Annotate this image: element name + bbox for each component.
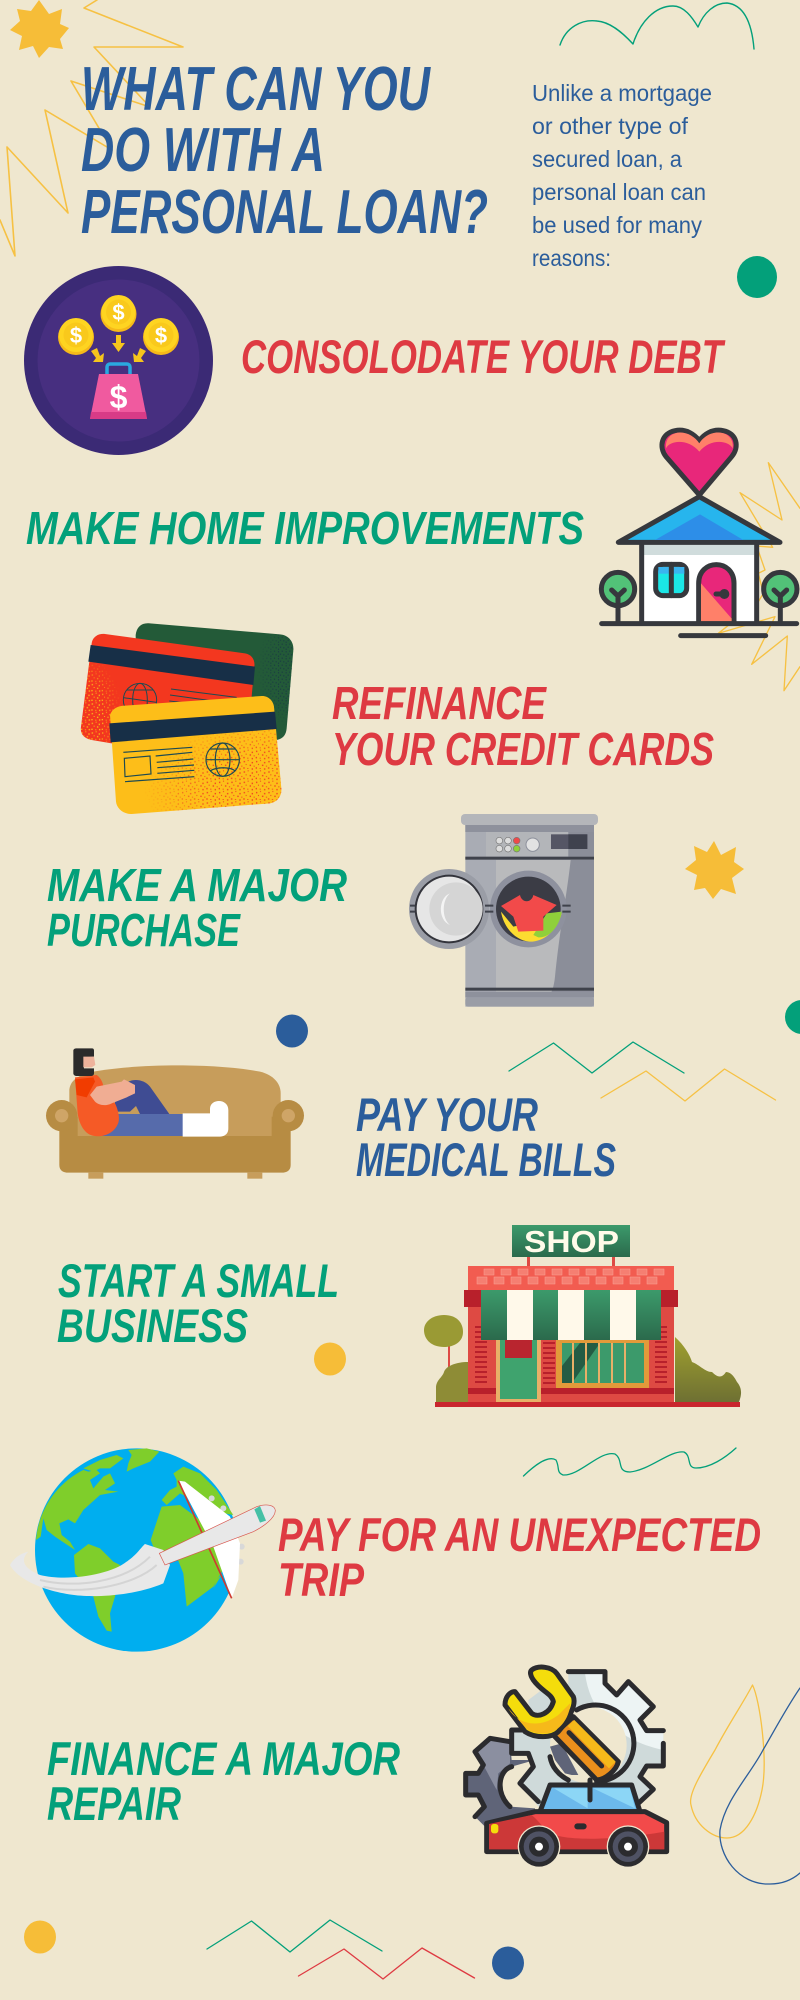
decoration: blue dot bottom [492,1946,524,1980]
decoration: yellow dot [314,1342,346,1376]
open door [409,869,489,949]
yellow zigzag behind house [718,463,800,691]
wrench shaft [553,1717,618,1780]
icon: credit cards [81,623,293,814]
icon: man on sofa [46,1048,304,1179]
door [496,1340,541,1402]
coins: $ [155,323,167,348]
wheels [518,1825,560,1868]
contrail [10,1544,170,1596]
title [81,55,488,247]
car body [487,1812,667,1852]
shop window [556,1340,649,1388]
icon: debt consolidation coins and bag [24,266,213,455]
decoration: green dot top right [737,256,777,298]
window [656,564,687,596]
heading: make a major purchase: MAKE A MAJOR [47,859,347,911]
house body [642,542,757,623]
decoration: green arcs top right [560,3,754,49]
red card [81,634,254,743]
decoration: yellow teardrop line [691,1685,764,1838]
decoration: green zigzag bottom [207,1920,382,1952]
heading: make a major purchase [47,859,347,956]
decoration: blue loop line [720,1688,800,1884]
heading: start a small business [57,1254,339,1352]
small gear [466,1738,535,1827]
yellow card [110,696,281,814]
heading: finance a major repair: REPAIR [47,1777,181,1830]
decoration: red zigzag bottom [298,1948,474,1979]
intro text block: secured loan, a [532,146,682,172]
decoration: green squiggle [524,1448,736,1476]
title: PERSONAL LOAN? [81,178,488,247]
roof [618,497,780,542]
trees [601,572,635,606]
intro text block: personal loan can [532,179,706,205]
car windows [540,1785,640,1812]
icon: washing machine [409,814,598,1007]
building [468,1266,674,1402]
fuselage [159,1505,275,1565]
icon: house with heart [601,430,800,691]
intro text block: reasons: [532,245,611,271]
sign [512,1225,630,1257]
control panel [496,834,587,852]
heading: pay your medical bills: PAY YOUR [356,1088,538,1141]
wing and engines [209,1495,215,1501]
coins: $ [70,323,82,348]
heading: refinance your credit cards: REFINANCE [332,677,547,729]
heading: pay for an unexpected trip [278,1508,761,1606]
green card [136,623,293,740]
coins: $ [112,300,125,325]
heading: finance a major repair: FINANCE A MAJOR [47,1732,400,1785]
icon: globe with plane [10,1448,275,1652]
decoration: yellow zigzag top left [0,0,183,256]
door [699,565,734,623]
heart [662,430,736,495]
heading: pay for an unexpected trip: TRIP [278,1553,365,1606]
intro text block: Unlike a mortgage [532,80,712,106]
hinges [410,906,571,912]
continents [36,1448,233,1632]
decoration: yellow dot bottom [24,1920,56,1954]
icon: gears wrench and car [466,1667,667,1868]
intro text block: or other type of [532,113,689,139]
coins [58,295,179,355]
decoration: blue dot [276,1014,308,1048]
decoration: green dot edge right [785,1000,800,1034]
man [115,1080,169,1114]
intro text block [532,80,712,271]
heading: make home improvements: MAKE HOME IMPROVEMENTS [26,502,584,554]
decoration: green zigzag [509,1042,684,1073]
heading: pay your medical bills [356,1088,616,1186]
ground strip [435,1402,740,1407]
icon: shop: SHOP [524,1224,619,1259]
ground lines [602,616,797,631]
icon: debt consolidation coins and bag: $ [110,379,128,415]
icon: yellow star top left [10,0,69,58]
decoration: yellow zigzag [601,1069,776,1101]
title: DO WITH A [81,116,325,185]
arrows to bag [91,335,146,362]
heading: start a small business: BUSINESS [57,1299,248,1352]
heading: refinance your credit cards [332,677,714,775]
heading: make a major purchase: PURCHASE [47,904,241,956]
drum with clothes [490,871,567,947]
big gear [512,1672,663,1807]
sofa [69,1065,281,1136]
heading: finance a major repair [47,1732,400,1830]
decoration: yellow star right [685,841,744,899]
awning [481,1290,661,1340]
wrench head [505,1667,574,1737]
intro text block: be used for many [532,212,702,238]
trees and bushes [448,1340,450,1372]
shopping bag [107,364,130,382]
heading: pay your medical bills: MEDICAL BILLS [356,1133,616,1186]
title: WHAT CAN YOU [81,55,432,124]
heading: start a small business: START A SMALL [58,1254,339,1307]
icon: shop [424,1224,741,1407]
